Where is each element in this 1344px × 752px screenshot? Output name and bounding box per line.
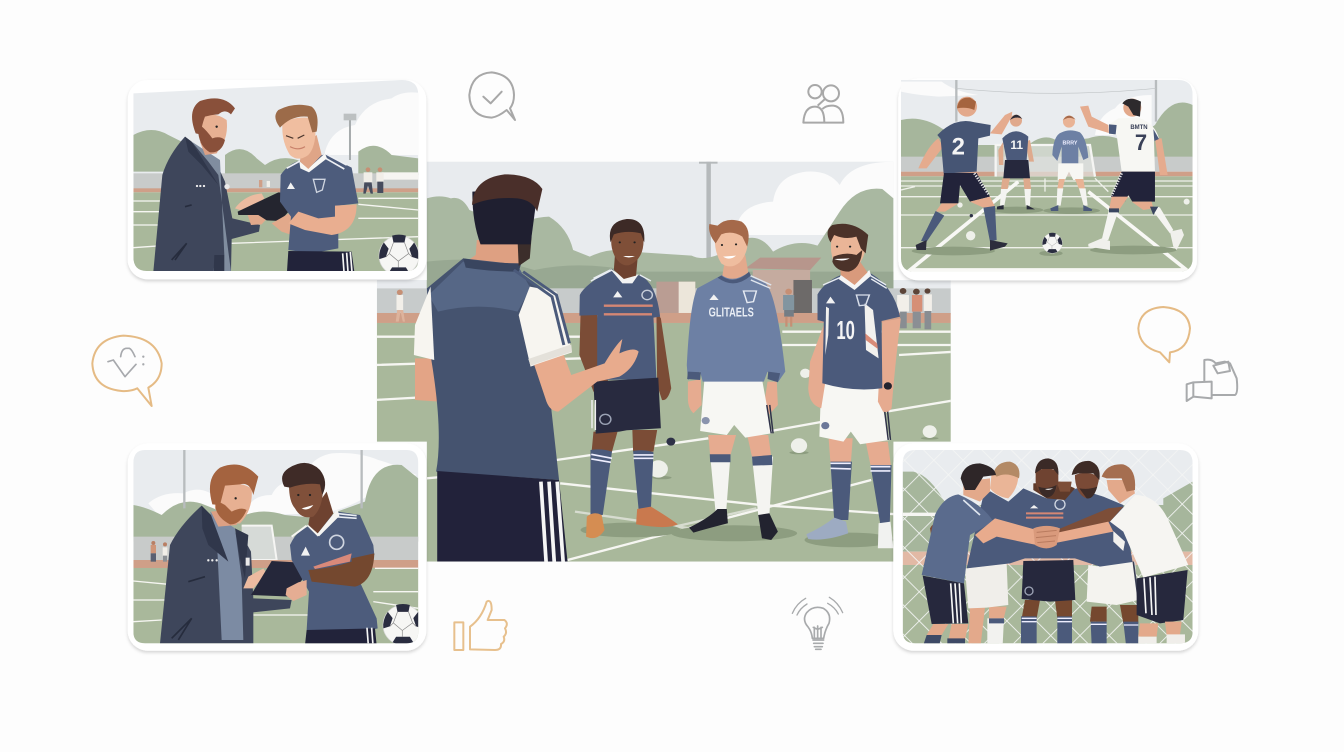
icon: two people — [803, 85, 843, 123]
huddle player left in front — [922, 463, 1047, 645]
icon: empty speech bubble — [1138, 307, 1190, 362]
player two: long-sleeve jersey — [687, 220, 785, 540]
panel: central coach talking to three players — [375, 155, 956, 563]
player number 2 — [916, 97, 1012, 251]
soccer ball — [382, 604, 418, 644]
coach in dark jacket — [160, 465, 292, 643]
player number 7 — [1080, 99, 1184, 250]
player two: long-sleeve jersey: GLITAELS — [709, 305, 754, 319]
player three: number 10 jersey — [806, 224, 901, 548]
icon: speech bubble with waveform — [92, 336, 162, 406]
huddle players, back row — [930, 458, 1138, 645]
icon: gray blocks — [1187, 360, 1237, 401]
tablet — [238, 192, 288, 221]
huddle player right in white — [1047, 464, 1188, 645]
coach seen from behind — [414, 174, 639, 562]
sky and background — [375, 155, 956, 292]
player number 11: 11 — [1010, 138, 1023, 152]
joined hands — [1033, 526, 1060, 548]
heads — [990, 458, 1100, 499]
panel: top-right players training with goal — [895, 75, 1200, 280]
player with dark skin — [282, 463, 378, 645]
player one: dark shorts — [579, 219, 678, 538]
illustration: football coaching scenes — [91, 71, 1238, 654]
goalkeeper in light jersey — [1050, 116, 1092, 211]
coach in dark jacket — [153, 98, 273, 272]
goal frame — [996, 145, 1095, 177]
icon: light bulb — [792, 597, 843, 649]
training balls — [649, 369, 939, 479]
player number 2: 2 — [952, 133, 965, 160]
panel: bottom-left coach and player with tablet — [125, 443, 430, 651]
pitch with fence and running track — [375, 270, 956, 563]
player number 7: BMTN — [1130, 125, 1148, 131]
player number 7: 7 — [1135, 130, 1147, 155]
player in navy jersey — [272, 105, 358, 272]
tablet — [251, 561, 302, 596]
icon: chat bubble with check — [469, 72, 515, 120]
player number 11 — [997, 115, 1035, 209]
icon: thumbs up — [454, 601, 507, 650]
goalkeeper in light jersey: BRRY — [1063, 140, 1078, 146]
background figures — [151, 541, 167, 562]
background figures — [396, 288, 932, 329]
panel: bottom-right team huddle behind chain fence — [890, 443, 1200, 651]
background players — [259, 167, 384, 194]
soccer ball — [378, 234, 418, 271]
soccer ball — [1042, 233, 1062, 253]
player three: number 10 jersey: 10 — [836, 315, 855, 345]
panel: top-left coach reviewing tablet with player — [125, 75, 430, 279]
